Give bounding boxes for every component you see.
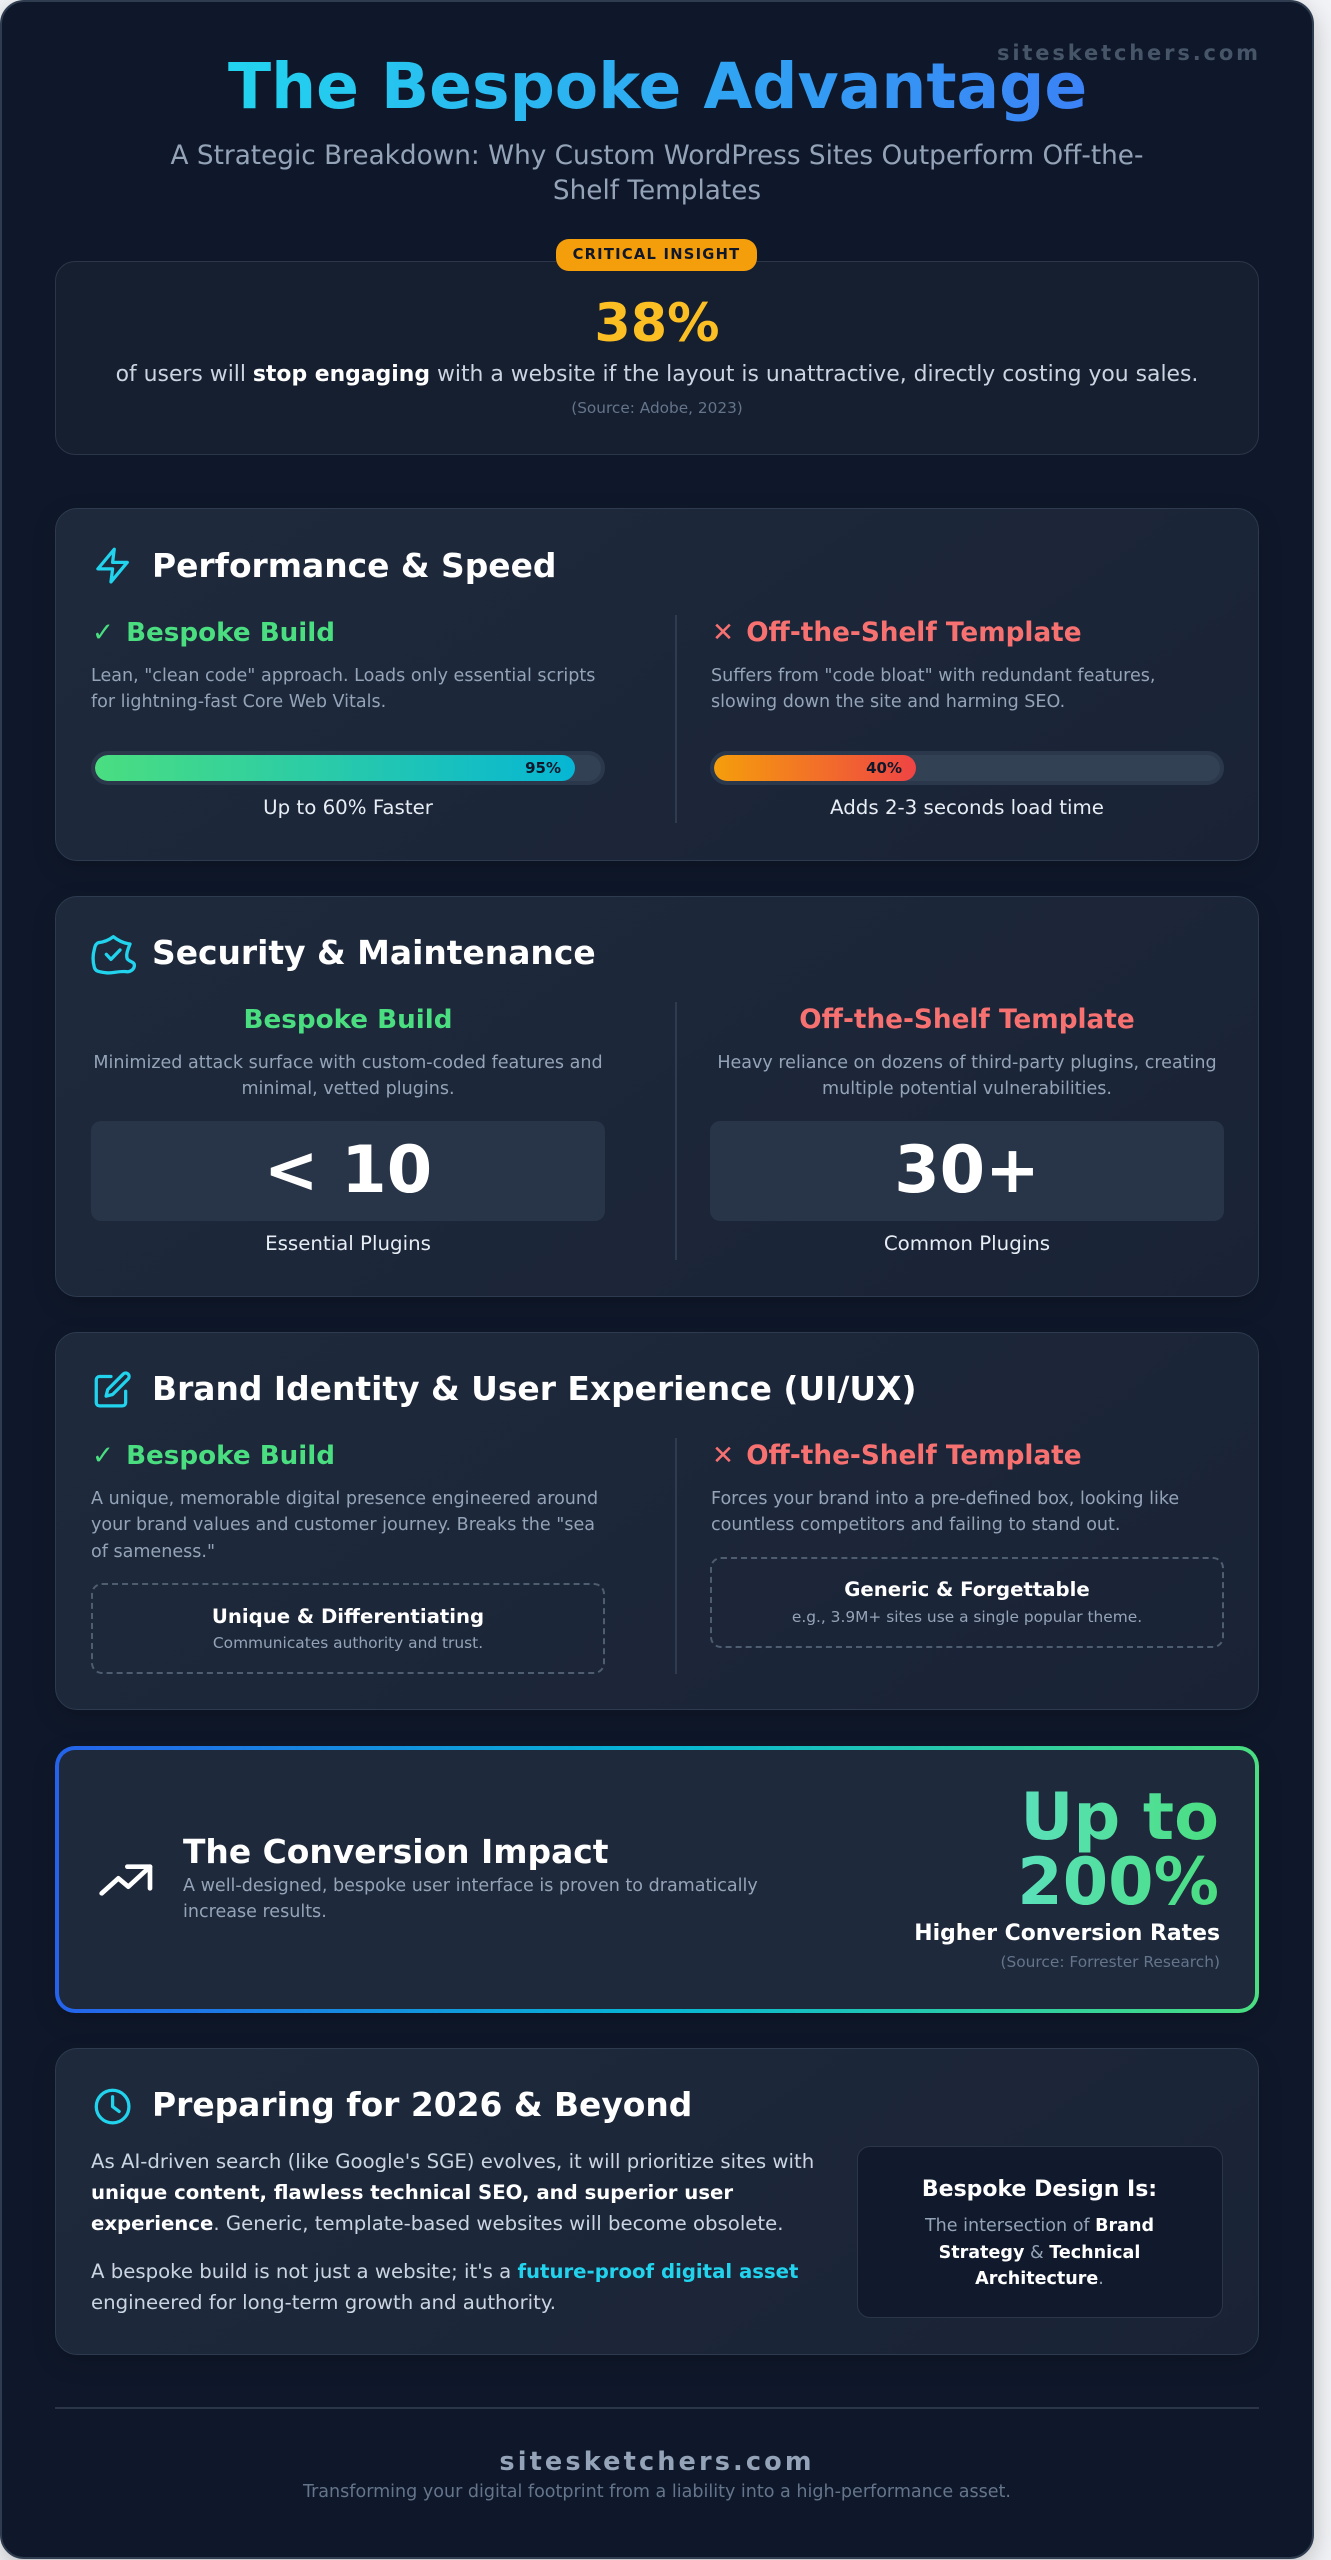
bar fill 95% [95,755,575,781]
subtitle: Shelf Templates [553,176,761,206]
conversion source: (Source: Forrester Research) [1000,1953,1220,1971]
stat label: Higher Conversion Rates [914,1921,1220,1946]
future text block: A bespoke build is not just a website; it's a future-proof digital asset [91,2260,798,2283]
template description: multiple potential vulnerabilities. [822,1079,1112,1099]
bar fill 40%: 40% [866,759,902,777]
future text block: As AI-driven search (like Google's SGE) evolves, it will prioritize sites with [91,2150,814,2173]
future text block: unique content, flawless technical SEO, and superior user [91,2181,733,2204]
footer tagline: Transforming your digital footprint from a liability into a high-performance asset. [303,2482,1011,2502]
template description: Suffers from "code bloat" with redundant features, [711,666,1155,686]
callout text: The intersection of Brand [925,2216,1154,2236]
icon: trending up [99,1864,152,1896]
insight source: (Source: Adobe, 2023) [571,399,743,417]
insight sentence: of users will stop engaging with a website if the layout is unattractive, directly costing you sales. [116,362,1198,387]
stat: up to 200%: Up to [1020,1779,1219,1855]
bespoke heading: ✓ Bespoke Build [92,1441,335,1471]
icon: clock [94,2088,131,2124]
watermark: sitesketchers.com [997,41,1261,65]
callout: generic and forgettable: e.g., 3.9M+ sites use a single popular theme. [792,1608,1142,1626]
icon: shield check [91,935,136,975]
icon: edit [94,1371,131,1408]
footer brand: sitesketchers.com [499,2447,815,2477]
template description: Forces your brand into a pre-defined box, looking like [711,1489,1179,1509]
bespoke speed caption: Up to 60% Faster [263,796,433,819]
callout: unique and differentiating: Unique & Differentiating [212,1605,484,1628]
badge: critical insight: CRITICAL INSIGHT [573,246,740,263]
heading: conversion impact: The Conversion Impact [183,1832,609,1871]
bespoke description [91,1489,598,1562]
template heading: Off-the-Shelf Template [799,1005,1135,1035]
template heading: ✕ Off-the-Shelf Template [712,1441,1082,1471]
stat: 30+ plugins: 30+ [894,1132,1040,1208]
callout: generic and forgettable: Generic & Forgettable [844,1578,1090,1601]
bespoke speed bar [91,751,605,785]
template description [717,1053,1217,1099]
future text block [91,2150,814,2314]
callout: generic and forgettable [710,1557,1224,1648]
panel: security and maintenance [55,896,1259,1297]
panel: conversion impact [55,1746,1259,2013]
icon: lightning bolt [96,548,129,584]
template speed caption: Adds 2-3 seconds load time [830,796,1104,819]
conversion description: increase results. [183,1902,327,1922]
heading: preparing for 2026: Preparing for 2026 & Beyond [152,2085,692,2124]
bespoke heading: Bespoke Build [244,1005,452,1035]
bespoke description [91,666,595,712]
bespoke description: Lean, "clean code" approach. Loads only essential scripts [91,666,595,686]
callout: unique and differentiating [91,1583,605,1674]
stat: under 10 plugins [91,1121,605,1221]
future text block: engineered for long-term growth and authority. [91,2291,556,2314]
callout heading: Bespoke Design Is: [922,2177,1157,2202]
callout text: Strategy & Technical [939,2242,1140,2262]
template description: slowing down the site and harming SEO. [711,692,1065,712]
future text block: experience. Generic, template-based websites will become obsolete. [91,2212,784,2235]
title: The Bespoke Advantage [228,49,1087,123]
panel: critical insight [55,239,1259,455]
stat: 38%: 38% [594,293,720,354]
callout: unique and differentiating: Communicates authority and trust. [213,1634,483,1652]
subtitle [170,141,1143,206]
bespoke description: your brand values and customer journey. Breaks the "sea [91,1515,595,1535]
bespoke description: of sameness." [91,1542,215,1562]
badge: critical insight [556,239,757,271]
bespoke heading: ✓ Bespoke Build [92,618,335,648]
template description [711,1489,1179,1535]
insight card background [55,261,1259,455]
conversion description: A well-designed, bespoke user interface is proven to dramatically [183,1876,758,1896]
callout text: Architecture. [975,2269,1104,2289]
bar fill 95%: 95% [525,759,561,777]
bespoke description: for lightning-fast Core Web Vitals. [91,692,386,712]
panel: brand identity and user experience [55,1332,1259,1710]
template heading: ✕ Off-the-Shelf Template [712,618,1082,648]
heading: performance and speed: Performance & Speed [152,546,556,585]
template plugins caption: Common Plugins [884,1232,1050,1255]
subtitle: A Strategic Breakdown: Why Custom WordPress Sites Outperform Off-the- [171,141,1143,171]
stat: under 10 plugins: < 10 [264,1132,432,1208]
bespoke description [93,1053,603,1099]
panel: preparing for 2026 [55,2048,1259,2355]
bar fill 40% [714,755,916,781]
bespoke description: Minimized attack surface with custom-coded features and [93,1053,603,1073]
stat: up to 200% [1000,1785,1219,1915]
bespoke description: minimal, vetted plugins. [241,1079,455,1099]
bespoke plugins caption: Essential Plugins [265,1232,431,1255]
heading: security and maintenance: Security & Maintenance [152,933,596,972]
callout: bespoke design is [857,2146,1223,2318]
stat: 30+ plugins [710,1121,1224,1221]
panel: performance and speed [55,508,1259,861]
template description: countless competitors and failing to stand out. [711,1515,1120,1535]
template description [711,666,1155,712]
template speed bar [710,751,1224,785]
stat: up to 200%: 200% [1017,1844,1219,1920]
template description: Heavy reliance on dozens of third-party plugins, creating [717,1053,1217,1073]
callout text [924,2216,1154,2289]
conversion description [183,1876,758,1922]
heading: brand identity: Brand Identity & User Experience (UI/UX) [152,1369,916,1408]
bespoke description: A unique, memorable digital presence engineered around [91,1489,598,1509]
